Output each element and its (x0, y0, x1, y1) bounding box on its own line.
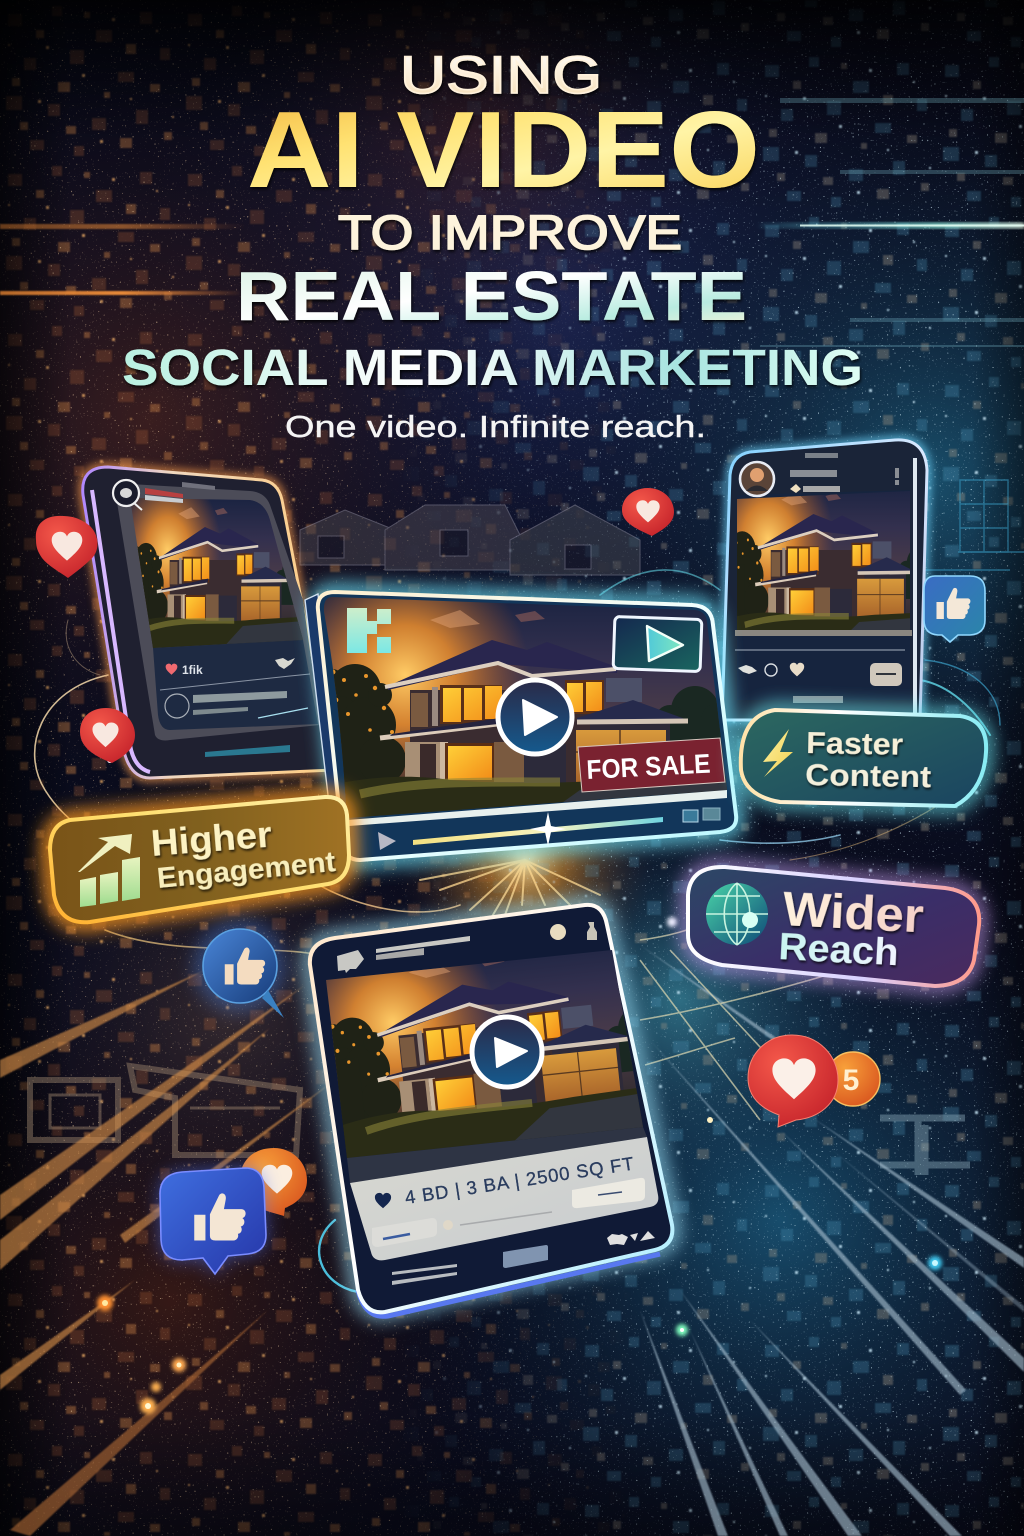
right phone header (740, 453, 899, 496)
like bubble: left round (194, 920, 286, 1018)
heart bubble with count: right: 5 (843, 1064, 859, 1097)
badge: higher engagement (50, 797, 349, 922)
background faint houses (300, 505, 640, 575)
badge: wider reach: Reach (778, 926, 900, 974)
tablet listing panel: 4 BD | 3 BA | 2500 SQ FT (403, 1153, 635, 1208)
top light streaks (0, 98, 1024, 347)
video controls (347, 790, 727, 850)
background bottom wireframe houses (30, 1066, 970, 1175)
title line: to improve: TO IMPROVE (338, 207, 682, 260)
small play card (613, 617, 702, 672)
rising chart icon (78, 834, 140, 907)
lightning bolt icon (763, 729, 793, 777)
background blue grid top right (920, 480, 1024, 570)
title line: ai video: AI VIDEO (247, 89, 760, 211)
heart bubble: left small (80, 708, 135, 763)
for sale sign (578, 738, 725, 792)
phone: left (83, 467, 334, 778)
badge: wider reach (688, 867, 979, 986)
badge: higher engagement: Higher (149, 814, 273, 864)
left phone lower panel: 1fik (182, 663, 203, 677)
video tablet: bottom (296, 905, 696, 1316)
tablet listing panel (347, 1127, 658, 1260)
right phone house image (737, 491, 910, 630)
heart bubble: top center (622, 488, 674, 536)
video player: center (300, 580, 750, 860)
badge: faster content (741, 710, 986, 806)
radiating rays bottom right (640, 917, 1024, 1536)
title line: real estate: REAL ESTATE (236, 257, 747, 335)
left phone house image (131, 498, 303, 648)
badge: faster content: Faster (806, 725, 903, 762)
video house image (324, 597, 727, 818)
badge: faster content: Content (805, 757, 931, 794)
like bubble: right phone (924, 576, 985, 642)
light burst below video (420, 860, 600, 920)
center play button (498, 680, 572, 754)
left phone lower panel (153, 640, 318, 757)
heart bubble: top left (36, 516, 98, 578)
heart bubble: bottom left orange (240, 1148, 307, 1216)
radiating rays bottom left (0, 757, 335, 1536)
for sale sign: FOR SALE (586, 749, 711, 785)
title (122, 46, 863, 396)
left phone top icons (113, 480, 215, 510)
tablet center play button (472, 1017, 542, 1087)
heart bubble with count: right (748, 1035, 880, 1127)
title line: social media marketing: SOCIAL MEDIA MARKETING (122, 339, 863, 396)
badge: wider reach: Wider (781, 883, 925, 943)
title line: using: USING (400, 46, 602, 105)
tablet bottom bar (392, 1231, 655, 1285)
tablet top bar (337, 922, 597, 973)
badge: higher engagement: Engagement (156, 846, 337, 895)
orange light points (64, 757, 186, 1414)
tablet house image (326, 950, 643, 1158)
orbit swoosh lines (35, 570, 1000, 1292)
globe icon (706, 883, 768, 945)
phone: right (714, 440, 948, 720)
tagline: One video. Infinite reach. (285, 409, 706, 444)
right phone lower panel (735, 630, 912, 703)
like button: bottom left blue (160, 1168, 266, 1274)
logo (347, 608, 391, 653)
